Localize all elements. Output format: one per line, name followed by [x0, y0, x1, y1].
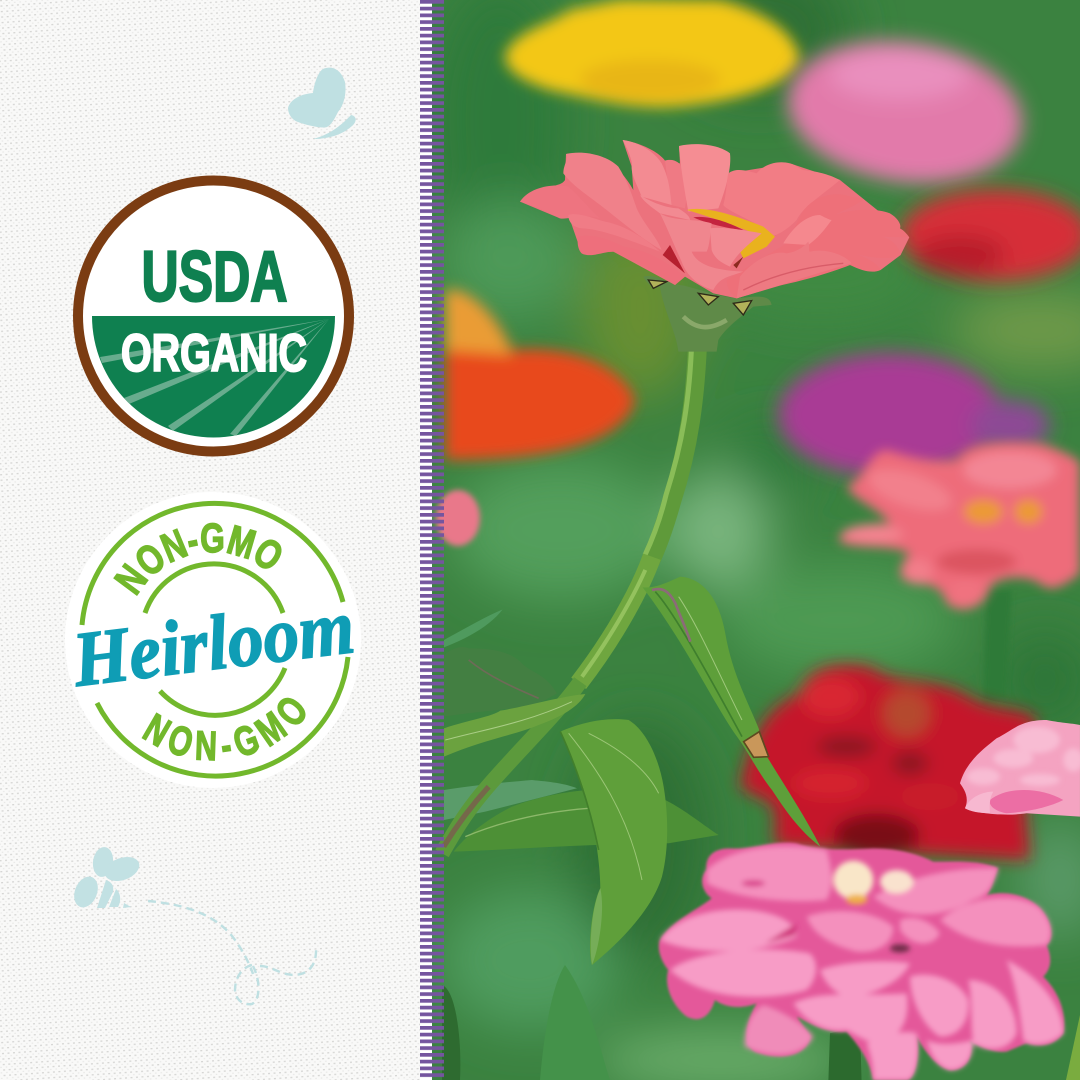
- icon: butterfly: [288, 68, 356, 139]
- leaves and stem layer: [442, 557, 820, 965]
- flower centre: [687, 209, 775, 258]
- blurred flower: purple: [778, 353, 1050, 477]
- decorative stripe divider: [420, 0, 444, 1080]
- text: USDA: USDA: [142, 238, 288, 317]
- small leaves at left edge: [442, 966, 590, 1080]
- text: NON-GMO bottom: NON-GMO: [142, 698, 306, 761]
- flower silhouette: [520, 140, 909, 298]
- main stem: [442, 557, 652, 853]
- leaf spot: [744, 732, 769, 757]
- text: ORGANIC: ORGANIC: [121, 324, 307, 383]
- organic field: [90, 316, 340, 441]
- photo: zinnia garden: [430, 0, 1080, 1080]
- text: NON-GMO top: NON-GMO: [113, 522, 282, 596]
- back petals: [520, 186, 569, 219]
- blurred flower: yellow: [505, 0, 800, 107]
- calyx: [643, 276, 772, 352]
- photo background foliage: [430, 0, 1080, 1080]
- badge: USDA Organic: [78, 180, 349, 452]
- leaf: horizontal lower: [454, 790, 719, 852]
- leaf: dull upper left: [444, 647, 557, 717]
- stem corner right: [1066, 1015, 1080, 1080]
- right pink zinnia: [960, 720, 1080, 817]
- leaf: back horizontal: [444, 780, 577, 820]
- badge: Non-GMO Heirloom: [65, 492, 361, 788]
- blurred flower: red right: [900, 189, 1080, 281]
- blurred flower: dark red: [740, 665, 1037, 860]
- blurred flower: small pink: [436, 490, 480, 546]
- text: Heirloom script: Heirloom: [67, 582, 359, 703]
- leaf: drooping centre: [560, 719, 667, 965]
- front petals: [640, 195, 690, 220]
- main zinnia flower: [520, 140, 909, 352]
- leaf: light diagonal: [444, 694, 585, 757]
- panel: fabric background: [0, 0, 432, 1080]
- leaf: upright tall: [643, 577, 820, 847]
- icon: bee with dashed flight path: [70, 846, 316, 1004]
- blurred flower: coral and stem: [740, 442, 1080, 860]
- bottom pink zinnia: [659, 843, 1064, 1080]
- main stem upper: [645, 330, 698, 562]
- blurred flower: pink top: [778, 26, 1032, 198]
- blurred flower: orange: [445, 290, 635, 460]
- leaf: thin upper: [444, 609, 503, 647]
